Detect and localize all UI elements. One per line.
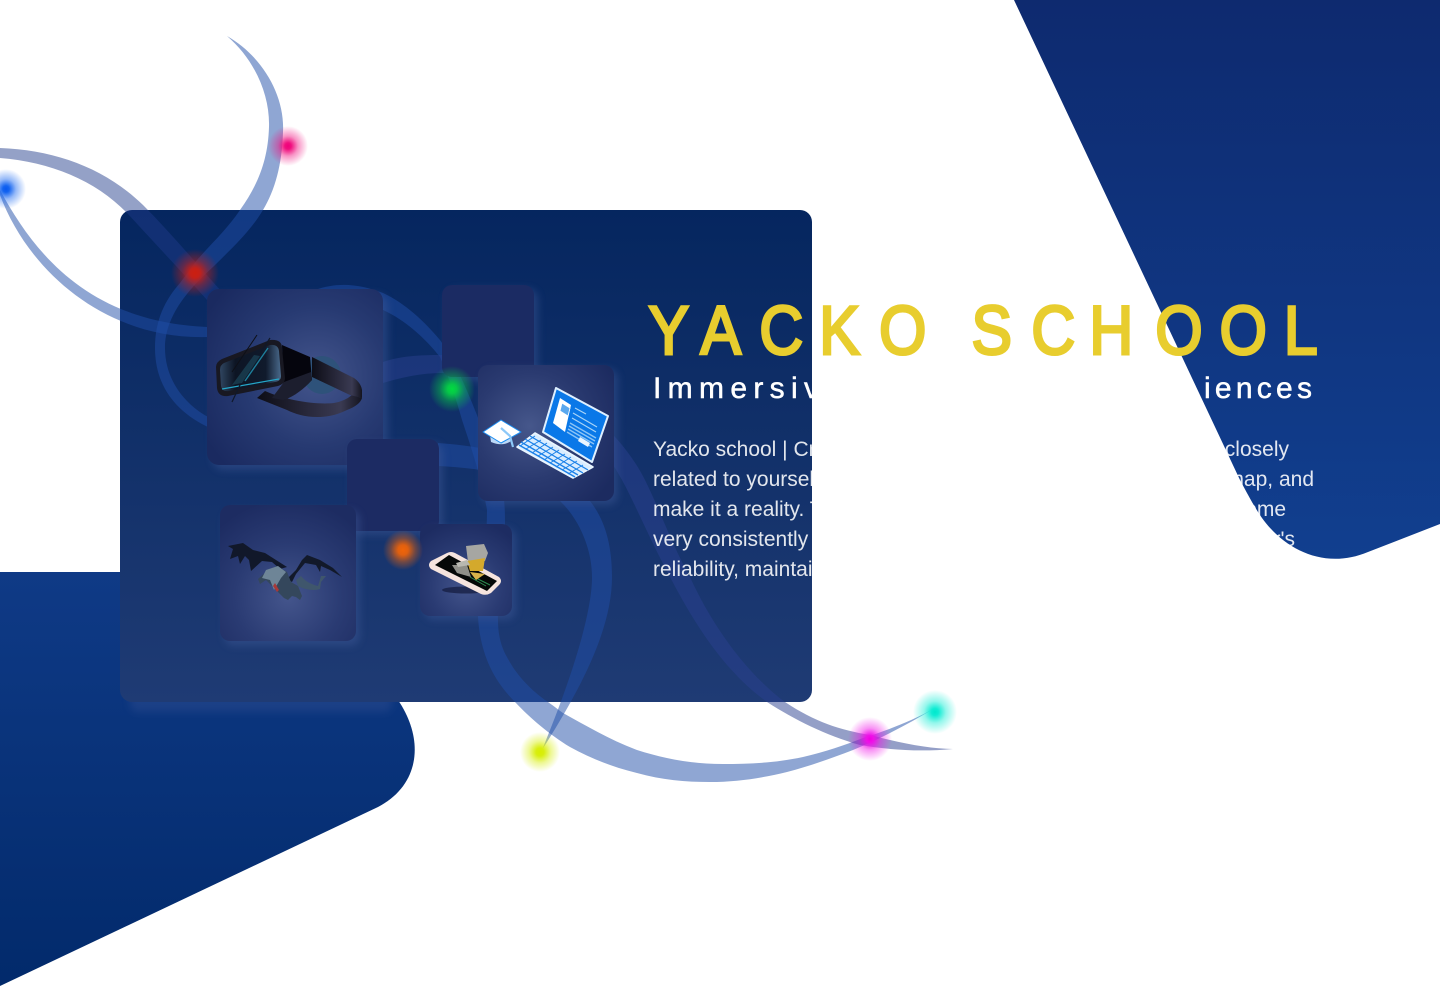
icon: graduation cap (483, 420, 521, 447)
card: empty middle (347, 439, 443, 535)
glow: red (171, 249, 219, 297)
icon: VR headset (216, 335, 362, 417)
icon: dragon (228, 543, 342, 600)
ribbon: thin left (0, 190, 207, 337)
title: YACKO SCHOOL (649, 291, 1318, 369)
glow: green (429, 366, 475, 412)
body text: left fragments: make it a reality. T (653, 498, 823, 521)
body text: right fragments: map, and (1226, 468, 1314, 491)
card: phone with lander (420, 524, 516, 620)
body text: right fragments: r's (1273, 528, 1295, 551)
glow: pink (268, 126, 308, 166)
body text: left fragments: very consistently (653, 528, 809, 551)
card: dragon (220, 505, 360, 646)
subtitle: right fragment: iences (1204, 372, 1312, 405)
subtitle: left fragment: Immersiv (653, 372, 819, 405)
card: laptop and graduation cap (478, 365, 618, 505)
body text: left fragments: Yacko school | Cr (653, 438, 816, 461)
body text: right fragments: closely (1225, 438, 1289, 461)
ribbon: to yellow tip (438, 443, 612, 750)
glow: cyan (913, 690, 957, 734)
icon: laptop (517, 388, 608, 478)
icon: phone with lander (429, 544, 501, 595)
top right background shape (1014, 0, 1440, 559)
body text: right fragments (1225, 438, 1314, 551)
ribbon: grey upper left (0, 148, 222, 300)
glow: yellow (520, 732, 560, 772)
body text: left fragments: related to yoursel (653, 468, 814, 491)
glow: orange (383, 530, 423, 570)
body text: right fragments: ome (1245, 498, 1286, 521)
ribbon: grey sweep to right tip (383, 355, 953, 750)
ribbon: large sweep to cyan (315, 285, 935, 782)
body text: left fragments: reliability, maintai (653, 558, 812, 581)
panel shadow (130, 690, 392, 712)
card: empty top (442, 285, 538, 381)
main panel (120, 210, 812, 702)
body text: left fragments (653, 438, 823, 581)
card: VR headset (207, 289, 388, 470)
glow: blue (0, 169, 26, 209)
bottom left background shape (0, 572, 415, 986)
ribbon: top loop (155, 36, 283, 428)
glow: magenta (848, 717, 892, 761)
